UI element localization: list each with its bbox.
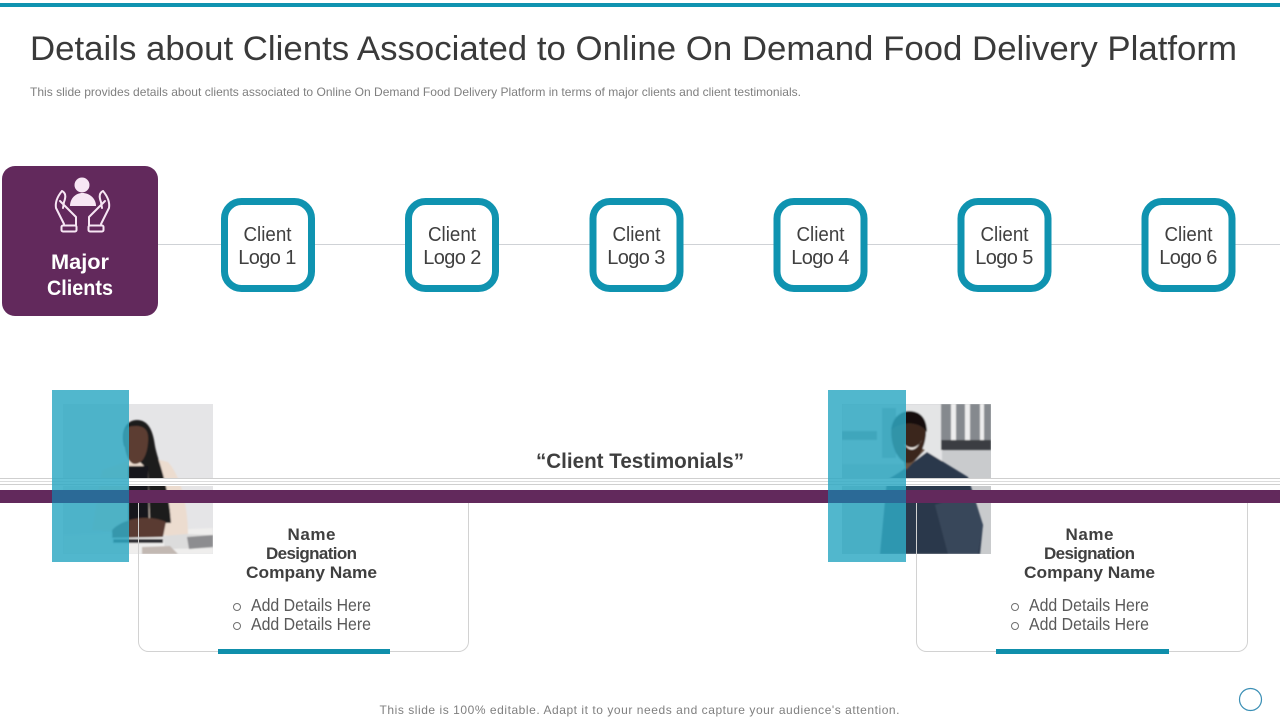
teal overlay left bbox=[52, 390, 129, 562]
client logo 6 bbox=[1145, 202, 1232, 288]
client logo 2: Logo 2 bbox=[423, 247, 481, 269]
client logo 4 bbox=[777, 202, 864, 288]
purple band bbox=[0, 490, 1280, 503]
client logo 2 bbox=[408, 202, 496, 288]
photo: woman at desk bbox=[111, 404, 213, 554]
card 1 details: Add Details Here bbox=[251, 595, 371, 615]
major clients label: Major bbox=[51, 251, 109, 274]
heading: client testimonials: “Client Testimonials” bbox=[536, 450, 744, 473]
client logo 6: Logo 6 bbox=[1159, 247, 1217, 269]
card 2 accent bbox=[996, 649, 1169, 654]
subtitle: This slide provides details about clients associated to Online On Demand Food Delivery Platform in terms of major clients and client testimonials. bbox=[30, 85, 801, 99]
teal overlay right bbox=[828, 390, 906, 562]
client logo 2: Client bbox=[428, 224, 476, 246]
card 2 details: Add Details Here bbox=[1029, 614, 1149, 634]
photo: man in blazer bbox=[842, 404, 991, 554]
client logo 6: Client bbox=[1164, 224, 1213, 246]
card 1 accent bbox=[218, 649, 390, 654]
card 2 name block: Name bbox=[1066, 525, 1114, 544]
client logo 1 bbox=[224, 202, 312, 288]
client logo 3 bbox=[593, 202, 680, 288]
testimonial band lines bbox=[0, 478, 1280, 486]
card: testimonial 2 bbox=[916, 503, 1248, 654]
panel: major clients: Clients bbox=[47, 277, 113, 300]
card 1 details bbox=[234, 595, 371, 634]
card 2 details: Add Details Here bbox=[1029, 595, 1149, 615]
card 2 name block: Company Name bbox=[1024, 563, 1155, 582]
card 1 name block bbox=[246, 525, 377, 582]
icon: hands holding person bbox=[56, 178, 109, 232]
panel: major clients bbox=[2, 166, 158, 316]
card 1 name block: Name bbox=[288, 525, 336, 544]
card: testimonial 1 bbox=[138, 503, 468, 654]
top accent bar bbox=[0, 3, 1280, 7]
client logo 4: Client bbox=[796, 224, 845, 246]
client logo 4: Logo 4 bbox=[791, 247, 849, 269]
card 2 name block bbox=[1024, 525, 1155, 582]
card 2 name block: Designation bbox=[1044, 544, 1135, 563]
client logo 3: Client bbox=[612, 224, 661, 246]
client logo 5: Logo 5 bbox=[975, 247, 1033, 269]
client logo 1: Client bbox=[244, 224, 292, 246]
title: Details about Clients Associated to Online On Demand Food Delivery Platform bbox=[30, 30, 1237, 68]
icon: circle marker bbox=[1240, 688, 1262, 710]
card 1 name block: Company Name bbox=[246, 563, 377, 582]
card 1 details: Add Details Here bbox=[251, 614, 371, 634]
footer note: This slide is 100% editable. Adapt it to your needs and capture your audience's attention. bbox=[380, 703, 900, 717]
client logo 1: Logo 1 bbox=[238, 247, 296, 269]
card 2 details bbox=[1012, 595, 1149, 634]
client logo 3: Logo 3 bbox=[607, 247, 665, 269]
client logo 5: Client bbox=[980, 224, 1029, 246]
card 1 name block: Designation bbox=[266, 544, 357, 563]
client logo 5 bbox=[961, 202, 1048, 288]
